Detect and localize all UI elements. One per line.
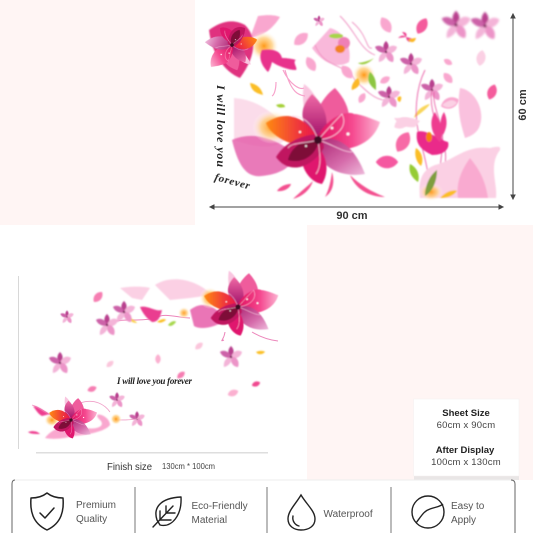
arrow: width dimension <box>210 205 503 209</box>
text: Easy to Apply <box>451 501 485 526</box>
pale wash behind upper lily <box>120 279 212 300</box>
after display heading: After Display <box>436 445 495 456</box>
script text: forever: forever <box>213 171 252 192</box>
orange glow upper <box>199 287 221 309</box>
panel: feature strip <box>0 480 533 533</box>
butterfly <box>398 32 416 42</box>
icon: water drop <box>288 495 315 530</box>
panel: sheet layout with dimensions <box>196 11 529 222</box>
text: Premium Quality: Quality <box>76 514 107 525</box>
script text vertical: I will love you: I will love you <box>214 84 228 167</box>
panel: finished display <box>18 271 278 473</box>
finish size value: 130cm * 100cm <box>162 461 215 471</box>
orange glow main <box>252 110 292 144</box>
text: Eco-Friendly Material <box>192 501 248 526</box>
strip frame sides <box>12 480 515 533</box>
vertical size rule <box>18 276 19 449</box>
icon: shield <box>31 493 63 530</box>
strip background <box>0 480 533 533</box>
small flowers <box>314 11 499 107</box>
flower stems and bouquet right <box>394 70 500 201</box>
secondary bloom upper <box>140 307 162 322</box>
watercolor wash behind main lily <box>234 98 290 147</box>
background: right pink block <box>307 225 533 480</box>
sheet size value: 60cm x 90cm <box>437 420 495 431</box>
card background <box>414 399 519 476</box>
strip frame top <box>15 479 511 481</box>
small flowers and petals <box>49 290 261 426</box>
magenta wash lower left <box>232 136 292 176</box>
text: Waterproof: Waterproof <box>324 509 373 520</box>
leaves upper <box>130 307 265 354</box>
label: 90 cm: 90 cm <box>336 210 368 222</box>
horizontal size rule <box>36 452 268 454</box>
upper lily <box>204 271 278 336</box>
text: Premium Quality <box>76 500 116 525</box>
text: Eco-Friendly Material: Material <box>192 515 227 526</box>
text: Premium Quality: Premium <box>76 500 116 511</box>
orange flower centre <box>352 58 376 90</box>
finish size caption: Finish size <box>107 461 152 473</box>
flower top-left <box>196 15 305 96</box>
lower-left bloom <box>28 396 140 439</box>
dividers <box>135 487 391 533</box>
sheet size heading: Sheet Size <box>442 408 490 419</box>
stray petals beneath main lily <box>277 172 385 199</box>
text: Easy to Apply: Apply <box>451 515 476 526</box>
label: 60 cm: 60 cm <box>517 89 529 121</box>
arrow: height dimension <box>511 14 515 199</box>
background: top-left pink block <box>0 0 195 225</box>
loose petals <box>291 15 499 168</box>
magenta wash upper <box>190 305 225 328</box>
text: Easy to Apply: Easy to <box>451 501 485 512</box>
card shadow <box>414 476 519 480</box>
centre top flower cluster <box>312 16 385 100</box>
main lily <box>266 84 380 184</box>
after display value: 100cm x 130cm <box>431 457 501 468</box>
yellow and green leaves <box>250 83 430 182</box>
icon: easy apply circle <box>412 496 444 528</box>
card: size information <box>414 399 519 480</box>
icon: leaf <box>153 497 181 527</box>
script text: I will love you forever: I will love you forever <box>116 376 192 386</box>
text: Eco-Friendly Material: Eco-Friendly <box>192 501 248 512</box>
stems upper <box>112 315 278 341</box>
